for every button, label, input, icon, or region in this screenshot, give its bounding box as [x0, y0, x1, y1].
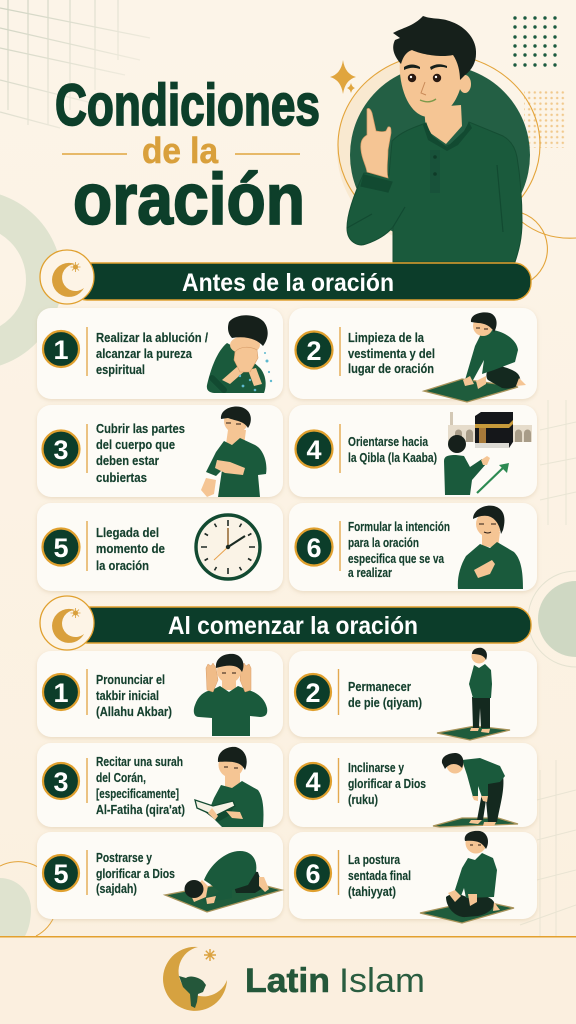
number badge 2	[296, 332, 332, 368]
step text: del Corán,	[96, 770, 146, 785]
step text: del cuerpo que	[96, 437, 175, 452]
step text: [especificamente]	[96, 786, 179, 801]
step text: la oración	[96, 558, 149, 573]
step text: vestimenta y del	[348, 346, 435, 361]
step text: Recitar una surah	[96, 754, 183, 769]
number badge 2: 2	[306, 336, 322, 366]
step text: (sajdah)	[96, 881, 137, 896]
step text: glorificar a Dios	[348, 776, 426, 791]
number badge 2: 2	[305, 678, 321, 708]
figure: boy washing face	[207, 315, 272, 393]
number badge 5: 5	[53, 859, 69, 889]
step text: la Qibla (la Kaaba)	[348, 450, 437, 465]
card 3: cubrir	[37, 405, 283, 497]
figure: hand on chest	[458, 506, 523, 589]
logo: latin islam: Islam	[339, 962, 425, 1000]
logo: latin islam: Latin	[245, 962, 330, 1000]
step text	[96, 525, 165, 573]
number badge 1: 1	[53, 335, 69, 365]
figure: standing	[437, 648, 510, 740]
step text	[348, 434, 437, 465]
number badge 6	[295, 855, 331, 891]
step text: especifica que se va	[348, 551, 445, 566]
number badge 4: 4	[306, 435, 322, 465]
number badge 1	[43, 674, 79, 710]
icon: crescent and star	[52, 608, 84, 643]
step text: Pronunciar el	[96, 672, 165, 687]
step text: takbir inicial	[96, 688, 159, 703]
figure: bowing	[433, 753, 518, 827]
step text: (Allahu Akbar)	[96, 704, 172, 719]
section banner: al comenzar	[40, 596, 531, 650]
step text: para la oración	[348, 535, 419, 550]
card 1: ablución	[37, 308, 283, 399]
step text: sentada final	[348, 868, 411, 883]
number badge 1	[43, 331, 79, 367]
step text: deben estar	[96, 453, 159, 468]
number badge 4: 4	[305, 767, 321, 797]
step text: Inclinarse y	[348, 760, 405, 775]
icon: clock	[196, 515, 260, 579]
step text: Orientarse hacia	[348, 434, 429, 449]
step text: alcanzar la pureza	[96, 346, 193, 361]
card 2: qiyam	[289, 648, 537, 740]
step text: Llegada del	[96, 525, 159, 540]
number badge 2	[295, 674, 331, 710]
step text: momento de	[96, 541, 165, 556]
boy figure	[347, 16, 522, 262]
card 2: limpieza	[289, 308, 537, 402]
card 6: tahiyyat	[289, 831, 537, 923]
number badge 3: 3	[53, 767, 69, 797]
figure: boy cleaning prayer rug	[424, 312, 526, 402]
figure: hands raised	[194, 654, 267, 736]
card 4: qibla	[289, 405, 537, 497]
step text	[96, 754, 185, 817]
section banner: antes de la oración	[40, 250, 531, 304]
step text: La postura	[348, 852, 401, 867]
title: de la	[142, 130, 219, 171]
step text	[348, 679, 422, 710]
icon: crescent and star	[52, 262, 84, 297]
step text	[348, 519, 450, 580]
dot grid: gold	[524, 90, 566, 148]
number badge 6: 6	[306, 533, 322, 563]
title	[55, 73, 320, 240]
icon: crescent with continent	[163, 947, 227, 1011]
step text: Formular la intención	[348, 519, 450, 534]
figure: boy covering	[201, 407, 266, 497]
card 5: sajdah	[37, 832, 283, 919]
step text: Permanecer	[348, 679, 411, 694]
number badge 5	[43, 855, 79, 891]
number badge 5	[42, 528, 80, 566]
step text	[348, 760, 426, 807]
step text: Limpieza de la	[348, 330, 425, 345]
step text: (ruku)	[348, 792, 378, 807]
number badge 3	[43, 763, 79, 799]
step text: lugar de oración	[348, 361, 434, 376]
card 6: intención	[289, 503, 537, 591]
card 5: hora	[37, 503, 283, 591]
footer band	[0, 936, 576, 1024]
step text: de pie (qiyam)	[348, 695, 422, 710]
figure: seated	[420, 831, 514, 923]
dot grid: dark	[513, 16, 557, 67]
card 4: ruku	[289, 743, 537, 827]
number badge 3: 3	[53, 435, 69, 465]
step text	[96, 672, 172, 719]
icon: sparkle	[330, 60, 356, 94]
step text: a realizar	[348, 565, 392, 580]
title: Condiciones	[55, 73, 320, 138]
step text: Al-Fatiha (qira'at)	[96, 802, 185, 817]
number badge 3	[42, 430, 80, 468]
step text: Realizar la ablución /	[96, 330, 208, 345]
footer rule	[0, 936, 576, 938]
step text: cubiertas	[96, 470, 147, 485]
step text	[348, 330, 435, 376]
step text: (tahiyyat)	[348, 884, 396, 899]
number badge 5: 5	[53, 533, 69, 563]
number badge 4	[295, 763, 331, 799]
step text	[96, 850, 175, 896]
number badge 6: 6	[305, 859, 321, 889]
card 1: takbir	[37, 651, 283, 737]
number badge 6	[296, 528, 332, 566]
logo: latin islam	[163, 947, 425, 1011]
number badge 4	[296, 430, 332, 468]
card 3: qira'at	[37, 743, 283, 827]
section banner: antes de la oración: Antes de la oración	[182, 269, 394, 297]
figure: reading book	[195, 747, 263, 827]
step text: glorificar a Dios	[96, 866, 175, 881]
step text	[348, 852, 411, 899]
step text: espiritual	[96, 362, 145, 377]
step text: Postrarse y	[96, 850, 153, 865]
figure: prostration	[165, 851, 282, 912]
step text	[96, 330, 208, 377]
number badge 1: 1	[53, 678, 69, 708]
hero illustration	[330, 16, 576, 282]
title: oración	[73, 160, 305, 240]
section banner: al comenzar: Al comenzar la oración	[168, 612, 418, 640]
step text	[96, 421, 185, 485]
step text: Cubrir las partes	[96, 421, 185, 436]
figure: kaaba and boy	[444, 412, 532, 495]
